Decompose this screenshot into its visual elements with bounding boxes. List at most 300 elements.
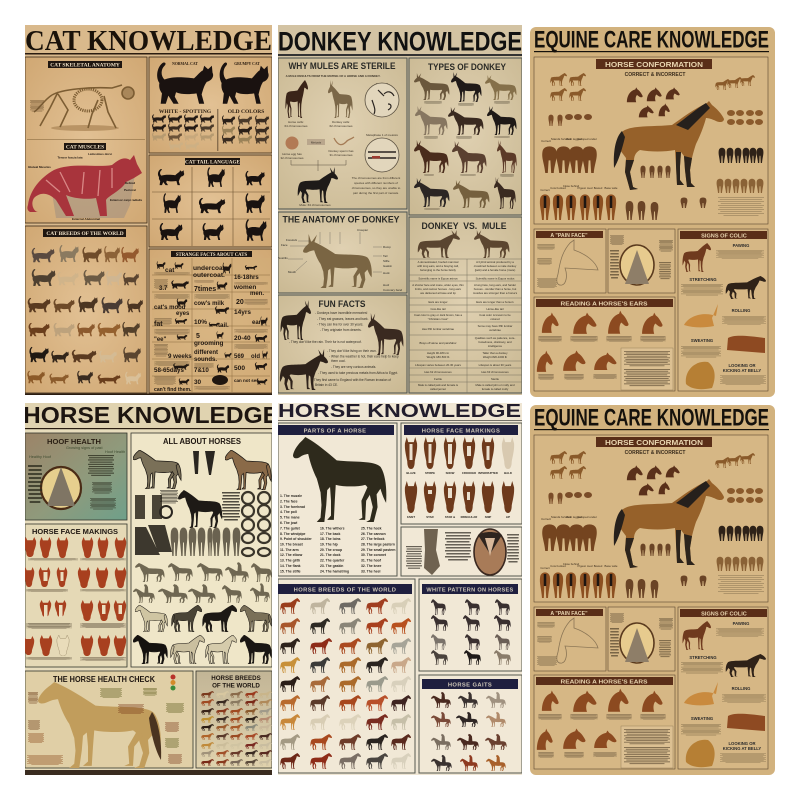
comparison table text: Horse-like tail	[487, 307, 504, 311]
poster: cat knowledge	[25, 25, 272, 395]
label: chromosomes: Donkey cells:	[332, 120, 350, 124]
neck conformation heads	[627, 87, 680, 117]
label: chromosomes: Donkey sperm has	[328, 149, 354, 153]
list: parts of a horse: 10. The breast	[280, 542, 304, 546]
comparison table text: Coat color is gray or dark brown, has a	[414, 313, 462, 317]
list: parts of a horse: 30. The coronet	[361, 553, 387, 557]
list: parts of a horse: 17. The back	[320, 532, 340, 536]
box: ear notes	[621, 348, 673, 390]
heading: reading a horse's ears	[536, 299, 673, 308]
colic sign labels	[689, 243, 761, 373]
subheading: correct and incorrect: CORRECT & INCORRECT	[625, 72, 685, 78]
face marking captions: LIP	[506, 515, 510, 519]
text: fun facts list: - They can live for over 30 years.	[317, 322, 363, 326]
panel: horse conformation	[534, 435, 768, 602]
list: parts of a horse: 31. The hoof	[361, 558, 382, 562]
heading: horse breeds of the world: HORSE BREEDS OF THE WORLD	[294, 588, 396, 594]
text lines: hoof labels	[610, 235, 673, 279]
face marking captions: IRREGULAR	[461, 515, 477, 519]
heading: a pain face: A "PAIN FACE"	[550, 611, 588, 617]
face marking captions: STAR &	[445, 515, 455, 519]
fact texts: 569	[234, 354, 245, 360]
icon: leg section	[424, 529, 440, 575]
group: hind views bottom: Close behind	[563, 562, 580, 566]
colic sign labels: KICKING AT BELLY	[723, 368, 761, 373]
comparison table text: "Christian cross"	[428, 317, 448, 321]
hoof text lines	[406, 532, 519, 569]
icon: mule cell circle	[365, 83, 399, 117]
comparison table text: colored	[490, 317, 500, 321]
group: hind views bottom: Pigeon toed	[578, 186, 593, 190]
heading: horse breeds of the world	[278, 584, 412, 594]
labels: anatomy leader lines and names: Stifle	[383, 259, 390, 263]
heading: the anatomy of donkey: THE ANATOMY OF DONKEY	[282, 214, 400, 224]
group: center hooves and legs	[626, 166, 706, 220]
text lines: pain signs	[537, 622, 557, 666]
comparison table text: Fertile	[434, 377, 442, 381]
face marking captions	[406, 471, 512, 519]
group: face marking portraits	[405, 437, 514, 513]
panel: horse breeds of the world	[196, 671, 272, 768]
group: hind views bottom: Close behind	[563, 184, 580, 188]
group: breed horses	[280, 598, 411, 769]
label: mule chromosomes: Mule: 63 chromosomes	[299, 203, 331, 207]
comparison table text: Some may have fifth lumbar	[478, 324, 512, 328]
comparison table text: Has 62 chromosomes	[424, 370, 452, 374]
comparison table text: A domesticated, hoofed mammal	[418, 260, 459, 264]
group: hind views top: Camped under	[577, 137, 597, 141]
comparison table text: Male is called john or molly and	[475, 383, 515, 387]
white head outline	[57, 635, 69, 656]
icon: egg	[286, 136, 298, 150]
body text lines	[154, 272, 268, 390]
comparison table text: Scientific name is Equus asinus	[418, 276, 458, 280]
panel: horse face makings	[23, 524, 127, 667]
comparison table text: Height 90-180 cm	[427, 351, 450, 355]
heading: horse breeds of the world	[211, 675, 261, 690]
text: fun facts list: - They originate from deserts.	[320, 328, 362, 332]
icon: traffic light key	[170, 674, 176, 690]
heading: types of donkey: TYPES OF DONKEY	[428, 62, 506, 72]
group: ear captions	[538, 336, 666, 380]
fact texts: 500	[234, 365, 245, 372]
panel: white pattern on horses	[419, 579, 522, 671]
panel: why mules are sterile	[278, 58, 407, 209]
labels: muscle names: External Abdominal	[72, 217, 100, 221]
heading: why mules are sterile: WHY MULES ARE STERILE	[288, 61, 396, 71]
heading: reading a horse's ears: READING A HORSE'S EARS	[560, 680, 648, 686]
labels: anatomy leader lines and names: Hoof	[383, 283, 389, 287]
fact texts: 5	[196, 333, 200, 340]
label: chromosomes: Horse egg has	[282, 152, 302, 156]
icon: horse head outline	[557, 618, 598, 663]
group: old color cats	[222, 116, 269, 144]
group: hind views top: Correct	[541, 139, 551, 143]
list: parts of a horse: 6. The jowl	[280, 521, 297, 525]
heading: cat skeletal anatomy: CAT SKELETAL ANATOMY	[50, 63, 120, 69]
text lines: pain signs	[537, 244, 557, 288]
fact texts: cow's milk	[194, 301, 225, 307]
label: meiosis box: Meiosis	[311, 140, 322, 144]
list: parts of a horse: 4. The poll	[280, 510, 297, 514]
fact texts: eyes	[176, 311, 190, 317]
panel: reading a horse's ears	[534, 675, 675, 769]
list: parts of a horse: 20. The croup	[320, 548, 342, 552]
text: fun facts list: - They don't like living on their own.	[327, 349, 377, 353]
fact texts: cat's mood	[154, 305, 186, 311]
comparison table text: Has fifth lumbar vertebrae	[422, 327, 455, 331]
white blazes	[44, 572, 122, 617]
icon: hoof cross-section	[620, 245, 654, 285]
panel: cat tail language	[149, 155, 272, 247]
list: parts of a horse: 11. The arm	[280, 548, 299, 552]
comparison table text: Has 63 chromosomes	[481, 370, 509, 374]
label: metaphase: Metaphase 1 of meiosis	[366, 133, 398, 137]
text: fun facts list: - They eat grasses, leaves and bark.	[317, 317, 369, 321]
list: parts of a horse: 25. The hock	[361, 526, 382, 530]
group: leg studies	[171, 528, 240, 556]
group: ear heads	[537, 689, 663, 750]
panel: parts of a horse	[278, 423, 397, 576]
heading: signs of colic: SIGNS OF COLIC	[701, 234, 747, 240]
list: parts of a horse: 24. The hamstring	[320, 570, 349, 574]
labels: hoof subheads: Hoof Health	[105, 450, 125, 454]
text: chromosome explanation: species with different numbers of	[354, 181, 398, 185]
list: parts of a horse: 16. The withers	[320, 526, 345, 530]
list: parts of a horse: 22. The quarter	[320, 558, 345, 562]
heading: horse breeds of the world: OF THE WORLD	[212, 682, 260, 690]
small limbs	[548, 114, 592, 126]
fact texts: 20	[236, 299, 244, 306]
text: fun facts list: them cool.	[331, 359, 346, 363]
fact texts: 3.7	[159, 286, 168, 292]
group: right legs and hooves	[717, 110, 764, 216]
fact texts: 14yrs	[234, 309, 251, 316]
heading: cat muscles: CAT MUSCLES	[66, 145, 104, 151]
label: grumpy cat: GRUMPY CAT	[234, 62, 260, 66]
label: chromosomes: Mule cell	[376, 82, 388, 86]
fact texts: fat	[154, 321, 163, 328]
labels: muscle names: Gluteal Muscles	[28, 165, 51, 169]
heading: horse face makings: HORSE FACE MAKINGS	[32, 527, 118, 536]
icon: horse head outline	[557, 240, 598, 285]
subheading: correct and incorrect: CORRECT & INCORRECT	[625, 450, 685, 456]
group: hind views bottom: Cow hocked	[550, 186, 566, 190]
list: parts of a horse: 32. The knee	[361, 564, 381, 568]
heading: reading a horse's ears	[536, 677, 673, 686]
group: hind views bottom: Cow hocked	[550, 564, 566, 568]
poster: horse knowledge centre	[278, 401, 522, 775]
panel: horse face markings	[401, 423, 522, 524]
comparison table text: female is called molly	[482, 387, 509, 391]
label: chromosomes: 62 chromosomes	[329, 124, 353, 128]
panel: a pain face	[534, 229, 606, 293]
list: parts of a horse: 26. The cannon	[361, 532, 386, 536]
icon: horse with numbered parts	[293, 437, 386, 522]
group: hind views bottom: Correct	[540, 188, 550, 192]
labels: anatomy leader lines and names: Gaskin	[383, 264, 392, 268]
list: parts of a horse: 28. The large pastern	[361, 542, 395, 546]
heading: horse face markings: HORSE FACE MARKINGS	[422, 428, 500, 434]
colic sign labels: SWEATING	[691, 338, 713, 343]
heading: horse breeds of the world: HORSE BREEDS	[211, 675, 261, 682]
label: normal cat: NORMAL CAT	[172, 62, 198, 66]
group: hind views top: Correct	[541, 517, 551, 521]
text: chromosome explanation	[352, 176, 401, 195]
heading: the horse health check: THE HORSE HEALTH CHECK	[53, 675, 155, 684]
labels: anatomy leader lines and names: Croupier	[357, 228, 368, 232]
group: face marking heads	[23, 537, 126, 656]
group: hind views bottom: Pigeon toed	[578, 564, 593, 568]
panel: hoof diagram	[608, 607, 675, 671]
panel: a pain face	[534, 607, 606, 671]
group: tiny breed horses	[201, 691, 272, 766]
labels: anatomy leader lines and names: Forelock	[286, 238, 298, 242]
icon: skeleton of a cat	[34, 85, 134, 131]
fact texts: outercoat.	[193, 272, 225, 279]
label: chromosomes	[280, 82, 388, 160]
fact texts: "ee"	[154, 337, 167, 343]
comparison table text: vertebrae	[489, 328, 501, 332]
labels: anatomy leader lines and names: Coronary band	[383, 288, 403, 292]
list: parts of a horse: 18. The loins	[320, 537, 341, 541]
comparison table text: hooves - sturdier than a horse, but	[474, 287, 517, 291]
list: parts of a horse: 9. Point of shoulder	[280, 537, 312, 541]
labels: muscle names: Tensor fascia lata	[57, 156, 83, 160]
list: parts of a horse: 23. The gaskin	[320, 564, 343, 568]
group: donkey types	[414, 72, 517, 209]
heading: white pattern on horses: WHITE PATTERN ON HORSES	[426, 588, 514, 594]
labels: anatomy leader lines and names: Mouth	[288, 270, 296, 274]
face marking captions: BLAZE	[406, 471, 416, 475]
colic sign labels: ROLLING	[732, 686, 750, 691]
colic sign labels: LOOKING OR	[728, 741, 756, 746]
icon: hoof cross-section	[41, 467, 81, 509]
hoof text lines	[28, 455, 116, 509]
heading: hoof health: HOOF HEALTH	[47, 437, 101, 446]
text: fun facts list: - They don't like the rain. Their fur is not waterproof.	[289, 340, 362, 344]
title: donkey knowledge: DONKEY KNOWLEDGE	[278, 26, 522, 56]
fact texts: can not see	[234, 378, 259, 383]
comparison table text: Lifespan is about 30 years	[479, 363, 512, 367]
labels: muscle names: Extensor carpi radialis	[110, 198, 143, 202]
colic text lines	[681, 628, 766, 762]
group: ear heads	[537, 311, 663, 372]
list: parts of a horse: 21. The dock	[320, 553, 341, 557]
group: donkey type captions	[424, 101, 514, 210]
labels: muscle names: Pectoral	[124, 188, 136, 192]
colic sign labels: KICKING AT BELLY	[723, 746, 761, 751]
group: hind views bottom: Base wide	[605, 564, 618, 568]
labels: anatomy leader lines and names: Face	[281, 243, 288, 247]
list: parts of a horse: 3. The forehead	[280, 505, 305, 509]
comparison table text: belonging to the horse family	[420, 268, 456, 272]
fact texts: different	[194, 350, 218, 356]
group: tail position cats	[158, 167, 267, 241]
labels: muscle names	[28, 152, 143, 221]
comparison table text: A long face, long ears, and harder	[474, 283, 516, 287]
text: fun facts list: - When the weather is hot, their ears help to keep	[329, 354, 399, 358]
comparison table text: A hybrid animal produced by a	[476, 260, 514, 264]
colic sign labels: STRETCHING	[689, 655, 717, 660]
labels: hoof subheads: Healthy Hoof	[29, 455, 52, 459]
colic text lines	[681, 250, 766, 384]
comparison table text: called jennet	[430, 387, 446, 391]
face marking captions: STRIPE	[425, 471, 435, 475]
fact texts: old	[251, 354, 260, 360]
blazes	[410, 444, 490, 500]
panel: donkey vs mule	[409, 217, 522, 393]
text: fun facts list: - They used to take precious metals from Africa to Egypt.	[318, 371, 398, 375]
heading: strange facts about cats	[171, 251, 252, 257]
group: horseshoes	[242, 492, 270, 556]
heading: donkey vs mule: DONKEY VS. MULE	[422, 221, 506, 231]
comparison table text: footedness, obstinacy, and	[478, 340, 512, 344]
comparison table text	[412, 260, 518, 391]
group: hind views top: Post legged	[566, 515, 582, 519]
icon: mule comparison	[474, 230, 509, 258]
group: draft horses	[133, 605, 271, 664]
heading: reading a horse's ears: READING A HORSE'S EARS	[560, 302, 648, 308]
list: parts of a horse: 27. The fetlock	[361, 537, 385, 541]
fact texts: 7&10	[194, 367, 209, 374]
comparison table text: Qualities such as patience, sure-	[475, 336, 515, 340]
group: health check notes	[27, 688, 184, 764]
text: chromosome explanation: The chromosomes are from different	[352, 176, 400, 180]
box: ear notes	[621, 726, 673, 768]
neck conformation heads	[627, 465, 680, 495]
group: hind views top: Camped under	[577, 515, 597, 519]
poster: donkey knowledge	[278, 25, 522, 395]
group: spotted cats	[152, 114, 214, 150]
label: chromosomes: 31 chromosomes	[329, 153, 353, 157]
fact texts: tail.	[218, 322, 229, 329]
comparison table text: Sterile	[491, 377, 499, 381]
heading: a pain face: A "PAIN FACE"	[550, 233, 588, 239]
panel: the horse health check	[25, 671, 193, 768]
fact texts: 9 weeks	[168, 353, 192, 360]
face marking captions: FAINT	[407, 515, 415, 519]
colic sign labels: PAWING	[733, 243, 749, 248]
panel: hoof diagram	[608, 229, 675, 293]
comparison table text: Brays off alone and pain/labor	[419, 341, 457, 345]
group: riders	[431, 692, 507, 771]
heading: old colors: OLD COLORS	[228, 109, 264, 115]
labels: anatomy leader lines and names: Rump	[383, 245, 391, 249]
group: gait sketches	[133, 562, 272, 603]
face marking captions: INTERRUPTED	[478, 471, 498, 475]
group: hind views bottom: Base wide	[605, 186, 618, 190]
heading: horse conformation: HORSE CONFORMATION	[605, 60, 703, 69]
labels: hoof subheads: Growing signs of past	[66, 446, 103, 450]
labels: muscle names: Deltoid	[125, 181, 135, 185]
title: cat knowledge: CAT KNOWLEDGE	[25, 25, 272, 57]
heading: horse conformation: HORSE CONFORMATION	[605, 438, 703, 447]
comparison table text: intelligence	[488, 344, 502, 348]
panel: the anatomy of donkey	[278, 212, 407, 293]
poster: horse knowledge left	[23, 402, 279, 775]
comparison table text: Ears are longer	[428, 300, 448, 304]
fact texts: cat	[165, 267, 175, 274]
comparison table text: Cow-like tail	[430, 307, 446, 311]
caption: mule origin: A MULE RESULTS FROM THE MATING OF A HORSE AND A DONKEY.	[286, 74, 381, 78]
labels: anatomy leader lines and names: Hock	[383, 271, 390, 275]
icon: normal cat silhouette	[157, 62, 213, 104]
labels: anatomy leader lines and names: Tail	[383, 254, 388, 258]
colic sign labels	[689, 621, 761, 751]
icon: hoof underside	[474, 529, 506, 575]
fact texts: 58-65days	[154, 367, 184, 374]
panel: signs of colic	[678, 607, 768, 769]
group: center hooves and legs	[626, 544, 706, 598]
heading: signs of colic	[680, 609, 767, 618]
panel: strange facts about cats	[149, 249, 272, 393]
list: parts of a horse: 8. The windpipe	[280, 532, 306, 536]
panel: normal and grumpy cats	[149, 57, 272, 153]
group: white pattern horses	[431, 599, 511, 665]
heading: cat breeds of the world: CAT BREEDS OF THE WORLD	[46, 231, 124, 237]
text: fun facts list: - They are very curious animals.	[331, 365, 376, 369]
title: horse knowledge navy: HORSE KNOWLEDGE	[278, 401, 521, 421]
comparison table text: muscles are stronger than a horse's	[473, 291, 518, 295]
heading: fun facts: FUN FACTS	[318, 299, 366, 310]
small conformation horses	[550, 73, 755, 101]
small conformation horses	[550, 451, 755, 479]
list: parts of a horse: 7. The gullet	[280, 526, 301, 530]
labels: hoof subheads	[29, 446, 125, 459]
icon: tan horse	[38, 682, 161, 768]
poster: equine care knowledge bottom	[530, 404, 775, 775]
text: fun facts list: Britain in 43 CE.	[315, 383, 338, 387]
list: parts of a horse: 29. The small pastern	[361, 548, 396, 552]
icon: donkey anatomy figure	[303, 234, 372, 288]
fact texts: ears	[252, 320, 265, 326]
comparison table text: Weight 820-1000 lb	[483, 355, 508, 359]
text lines: hoof labels	[610, 613, 673, 657]
comparison table text: limbs, and narrow hooves - long ears	[415, 287, 462, 291]
icon: mule	[298, 167, 338, 203]
face marking captions: SNIP	[485, 515, 491, 519]
comparison table text: Ears are longer than a horse's	[476, 300, 514, 304]
fact texts: 16-18hrs	[234, 275, 259, 281]
group: hind views top	[541, 137, 597, 173]
icons: donkeys	[280, 300, 403, 390]
label: meiosis box	[307, 139, 325, 145]
fact texts: 7times	[194, 286, 216, 293]
group: hind views bottom	[540, 184, 618, 220]
panel: signs of colic	[678, 229, 768, 391]
title: horse knowledge: HORSE KNOWLEDGE	[23, 402, 279, 428]
colic sign labels: SWEATING	[691, 716, 713, 721]
group: fact cat icons	[157, 261, 268, 385]
text: chromosome explanation: pair during the first part of meiosis.	[353, 191, 399, 195]
labels: anatomy leader lines and names	[278, 228, 403, 292]
face marking captions: BALD	[504, 471, 512, 475]
fact texts: grooming	[194, 340, 224, 347]
heading: white spotting: WHITE - SPOTTING	[159, 109, 212, 115]
colic sign labels: PAWING	[733, 621, 749, 626]
list: parts of a horse	[280, 494, 396, 574]
heading: all about horses: ALL ABOUT HORSES	[163, 437, 241, 446]
main horse	[614, 101, 724, 190]
face caption lines	[26, 558, 126, 661]
heading: signs of colic	[680, 231, 767, 240]
text: fun facts list: - They first came to England with the Roman invasion of	[312, 378, 391, 382]
text: fun facts list	[289, 311, 399, 387]
panel: cat breeds of the world	[25, 226, 147, 393]
comparison table text: Lifespan varies between 20-30 years	[415, 363, 461, 367]
panel: fun facts	[278, 295, 407, 393]
